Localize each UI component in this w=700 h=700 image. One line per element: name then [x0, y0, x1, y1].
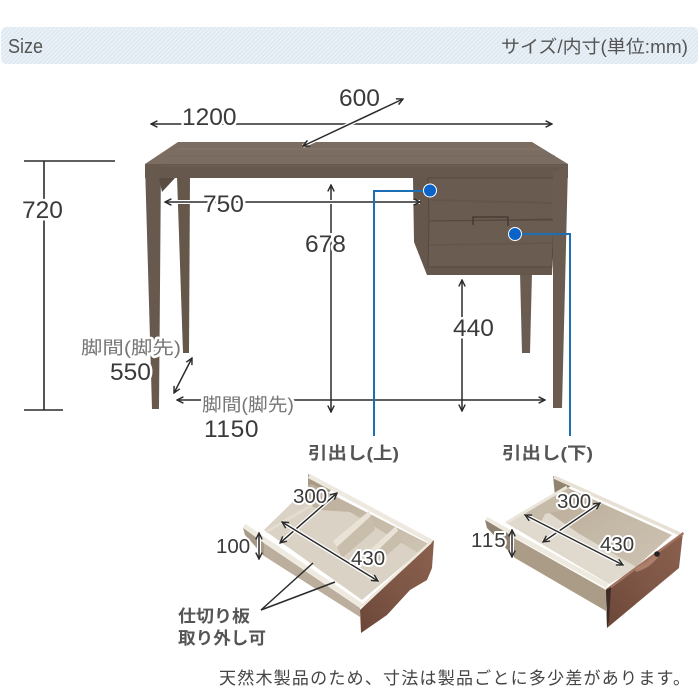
- drawer unit: [413, 178, 556, 275]
- upper drawer illustration: [243, 474, 434, 633]
- lower drawer illustration: [485, 476, 684, 628]
- note: removable dividers: 取り外し可: [178, 629, 266, 648]
- dimension: width 1200: 1200: [182, 104, 237, 131]
- interior wall: [535, 488, 672, 574]
- lower drawer dimensions: 300: [557, 490, 591, 513]
- handle notch: [635, 553, 658, 572]
- front right leg: [553, 165, 568, 408]
- note: removable dividers: 仕切り板: [178, 607, 250, 626]
- marker: upper drawer: [424, 184, 436, 197]
- value: 550: 550: [110, 359, 151, 386]
- divider one: [333, 511, 371, 547]
- upper drawer dimensions: 300: [293, 485, 327, 508]
- rear panel: [522, 487, 570, 524]
- pointer lines to removable dividers: [261, 563, 335, 610]
- dimension: knee width 750: 750: [203, 191, 244, 218]
- lower drawer dimensions: 430: [600, 533, 634, 556]
- dimension: knee clearance height 678: 678: [305, 231, 346, 258]
- dimension: under-drawer height 440: 440: [453, 315, 494, 342]
- divider two: [370, 526, 398, 554]
- dimension: leg span 550: [81, 338, 192, 393]
- drawer floor: [506, 505, 638, 584]
- outer side panel: [264, 543, 360, 617]
- value: 1150: 1150: [204, 416, 259, 443]
- left rim: [486, 519, 607, 586]
- walnut front: [606, 532, 683, 628]
- dimension: height 720: 720: [22, 197, 63, 224]
- dimension: under-drawer height 440: [453, 280, 494, 411]
- upper drawer front: [428, 178, 554, 221]
- corner brace: [159, 178, 175, 192]
- front left leg: [145, 164, 161, 409]
- footnote: 天然木製品のため、寸法は製品ごとに多少差があります。: [219, 669, 690, 688]
- back right leg: [520, 272, 532, 353]
- desk top surface: [145, 142, 568, 164]
- left stub face: [243, 528, 264, 556]
- rear rim: [266, 505, 312, 532]
- far wall: [298, 484, 429, 553]
- rear rim: [506, 487, 567, 523]
- marker: lower drawer: [508, 228, 522, 240]
- outer side panel: [514, 538, 606, 611]
- drawer handle: [473, 217, 508, 226]
- lower drawer dimensions: 115: [471, 529, 507, 552]
- heading: upper drawer: 引出し(上): [308, 444, 399, 463]
- walnut front: [360, 540, 434, 633]
- callout lines to drawers: [374, 184, 570, 436]
- desk front apron: [145, 164, 568, 178]
- left rim: [244, 526, 362, 606]
- upper drawer dimensions: [216, 485, 385, 581]
- heading: Size: Size: [8, 36, 43, 58]
- back rim: [309, 476, 432, 542]
- label: leg depth span: 脚間(脚先): [81, 338, 181, 358]
- rear stub of back side panel: [553, 476, 571, 496]
- upper drawer dimensions: 430: [351, 547, 385, 570]
- lower drawer front: [428, 220, 554, 267]
- unit label: サイズ/内寸(単位:mm): [501, 37, 688, 57]
- upper drawer dimensions: 100: [216, 535, 250, 558]
- header band: [1, 27, 698, 64]
- dimension: depth 600: 600: [339, 85, 380, 112]
- lower drawer dimensions: [471, 490, 634, 565]
- back rim: [554, 477, 680, 534]
- interior floor and walls: [264, 484, 429, 600]
- desk illustration: [145, 142, 568, 409]
- label: leg span: 脚間(脚先): [202, 395, 294, 415]
- left stub face: [485, 520, 515, 558]
- dimension: leg span 1150: [177, 395, 545, 443]
- back left leg: [177, 176, 190, 353]
- rear stub of back side panel: [308, 474, 334, 506]
- heading: lower drawer: 引出し(下): [502, 444, 593, 463]
- dimension: depth 600: [303, 85, 403, 146]
- note: removable dividers: [178, 607, 266, 648]
